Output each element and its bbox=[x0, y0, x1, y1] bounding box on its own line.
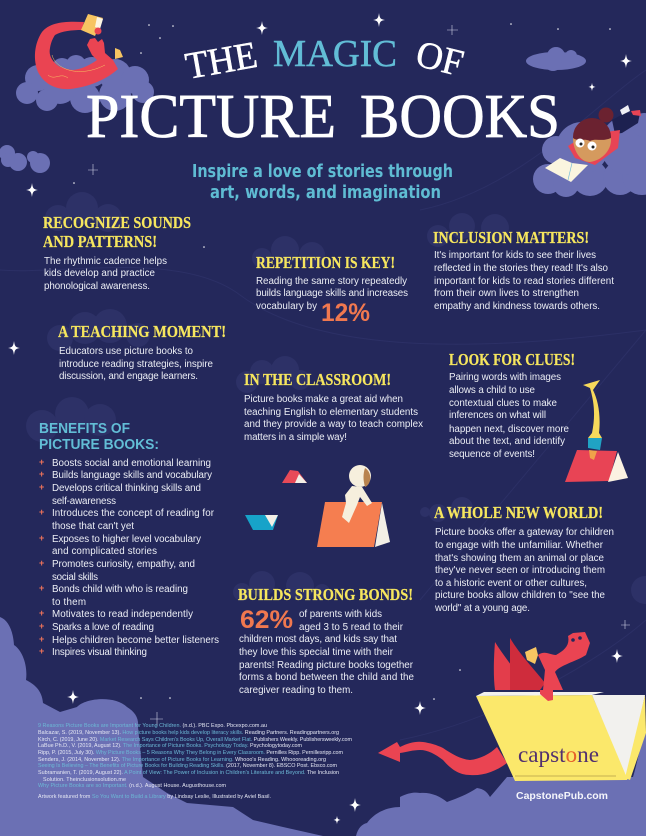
body: that's showing them an animal or place bbox=[435, 553, 605, 564]
section: repetition is key: REPETITION IS KEY! bbox=[256, 253, 395, 272]
bullets: + bbox=[39, 482, 44, 492]
body: The rhythmic cadence helps bbox=[44, 256, 167, 267]
list: Exposes to higher level vocabulary bbox=[52, 534, 201, 545]
list bbox=[52, 458, 219, 658]
body: teaching English to elementary students bbox=[244, 407, 418, 418]
body bbox=[256, 276, 408, 312]
section: a teaching moment: A TEACHING MOMENT! bbox=[58, 322, 226, 341]
section: inclusion matters bbox=[433, 228, 614, 312]
body: Pairing words with images bbox=[449, 372, 561, 383]
word: THE: THE bbox=[182, 34, 260, 88]
body: to engage with the unfamiliar. Whether bbox=[435, 540, 604, 551]
body: Educators use picture books to bbox=[59, 346, 194, 357]
girl reading on cloud bbox=[545, 105, 641, 182]
list: Inspires visual thinking bbox=[52, 647, 147, 658]
references: Kirch, C. (2019, June 20). Market Research Says Children's Books Up, Overall Market Flat. Publishers Weekly. Publishersweekly.com bbox=[38, 737, 352, 743]
heading: PICTURE BOOKS: bbox=[39, 437, 159, 453]
body: aged 3 to 5 read to their bbox=[299, 622, 404, 633]
heading: BENEFITS OF bbox=[39, 421, 130, 437]
list: Motivates to read independently bbox=[52, 609, 193, 620]
body: builds language skills and increases bbox=[256, 288, 408, 299]
heading: RECOGNIZE SOUNDS bbox=[43, 213, 191, 232]
references: Artwork featured from So You Want to Build a Library by Lindsay Leslie, Illustrated by Aviel Basil. bbox=[38, 794, 271, 800]
body: vocabulary by bbox=[256, 301, 317, 312]
body bbox=[59, 346, 214, 382]
section: in the classroom: IN THE CLASSROOM! bbox=[244, 370, 391, 389]
body bbox=[434, 527, 614, 614]
bullets: + bbox=[39, 634, 44, 644]
url: CapstonePub.com bbox=[516, 791, 608, 802]
list: Helps children become better listeners bbox=[52, 635, 219, 646]
body: of parents with kids bbox=[299, 609, 382, 620]
body: they've never seen or introducing them bbox=[435, 565, 605, 576]
section: in the classroom bbox=[244, 370, 423, 443]
word: PICTURE BOOKS: BOOKS bbox=[360, 83, 560, 151]
references: LaBue Ph.D., V. (2019, August 12). The Importance of Picture Books. Psychology Today. Psychologytoday.com bbox=[38, 743, 302, 749]
list: Develops critical thinking skills and bbox=[52, 483, 201, 494]
body: inferences on what will bbox=[449, 410, 546, 421]
body: about the text, and identify bbox=[449, 436, 565, 447]
body: contextual clues to make bbox=[449, 398, 558, 409]
section: builds strong bonds: BUILDS STRONG BONDS! bbox=[238, 585, 413, 604]
word: OF: OF bbox=[412, 33, 468, 85]
logo: capstone bbox=[518, 742, 599, 767]
list: self-awareness bbox=[52, 496, 116, 507]
references: Balcazar, S. (2019, November 13). How picture books help kids develop literacy skills. Reading Partners. Readingpartners.org bbox=[38, 730, 339, 736]
body: empathy and kindness towards others. bbox=[434, 301, 600, 312]
section: a whole new world bbox=[434, 503, 614, 614]
dragon reading, top left bbox=[35, 14, 123, 89]
cloud: under girl bbox=[533, 113, 646, 197]
list: Bonds child with who is reading bbox=[52, 584, 188, 595]
list: Promotes curiosity, empathy, and bbox=[52, 559, 195, 570]
cloud: bottom right bbox=[356, 733, 646, 836]
stat: 12%: 12% bbox=[321, 299, 370, 327]
subtitle bbox=[192, 161, 453, 203]
cloud: small left bbox=[0, 145, 50, 173]
list: to them bbox=[52, 597, 86, 608]
section: a whole new world: A WHOLE NEW WORLD! bbox=[434, 503, 603, 522]
heading bbox=[43, 213, 191, 251]
section: builds strong bonds bbox=[238, 585, 415, 696]
list: those that can't yet bbox=[52, 521, 134, 532]
body: reflected in the stories they read! It's also bbox=[434, 263, 609, 274]
list: Introduces the concept of reading for bbox=[52, 508, 215, 519]
section: inclusion matters: INCLUSION MATTERS! bbox=[433, 228, 589, 247]
body: sequence of events! bbox=[449, 449, 535, 460]
cloud: top left under dragon bbox=[16, 55, 154, 113]
body: It's important for kids to see their lives bbox=[434, 250, 596, 261]
word: PICTURE BOOKS: PICTURE bbox=[86, 83, 336, 151]
section: a teaching moment bbox=[58, 322, 226, 382]
body: introduce reading strategies, inspire bbox=[59, 359, 214, 370]
bullets: + bbox=[39, 583, 44, 593]
heading: AND PATTERNS! bbox=[43, 232, 157, 251]
illustration: blue book bbox=[245, 515, 278, 530]
body: and they provide a way to teach complex bbox=[244, 419, 423, 430]
bullets: + bbox=[39, 469, 44, 479]
section: look for clues: LOOK FOR CLUES! bbox=[449, 350, 575, 369]
list: Boosts social and emotional learning bbox=[52, 458, 211, 469]
illustration: astronaut on orange book bbox=[317, 465, 390, 547]
bullets: + bbox=[39, 507, 44, 517]
list: social skills bbox=[52, 572, 98, 583]
references bbox=[38, 723, 352, 800]
body bbox=[44, 256, 167, 292]
body: children most days, and kids say that bbox=[239, 634, 397, 645]
cloud: bottom left bbox=[0, 617, 323, 836]
body bbox=[434, 250, 614, 312]
references: Ripp, P. (2015, July 30). Why Picture Books – 5 Reasons Why They Belong in Every Classroom. Pernilles Ripp. Pernillesripp.com bbox=[38, 750, 344, 756]
word: PICTURE BOOKS bbox=[86, 83, 560, 151]
body bbox=[244, 394, 423, 443]
stat: 62%: 62% bbox=[240, 606, 293, 634]
cloud: small top right bbox=[526, 47, 586, 71]
bullets bbox=[39, 457, 44, 656]
references: Why Picture Books are so Important. (n.d.). August House. Augusthouse.com bbox=[38, 783, 226, 789]
body bbox=[449, 372, 570, 460]
body: kids develop and practice bbox=[44, 268, 156, 279]
body: caregiver reading to them. bbox=[239, 685, 353, 696]
body: to a historic event or other cultures, bbox=[435, 578, 587, 589]
list: Builds language skills and vocabulary bbox=[52, 470, 212, 481]
word: MAGIC: MAGIC bbox=[273, 33, 397, 75]
bullets: + bbox=[39, 533, 44, 543]
body: Reading the same story repeatedly bbox=[256, 276, 407, 287]
body: Picture books make a great aid when bbox=[244, 394, 403, 405]
bullets: + bbox=[39, 646, 44, 656]
illustration: dragon on yellow book with capstone logo bbox=[378, 632, 646, 802]
subtitle: art, words, and imagination bbox=[210, 182, 441, 203]
references: 9 Reasons Picture Books are Important for Young Children. (n.d.). PBC Expo. Pbcexpo.com.au bbox=[38, 723, 267, 729]
bullets: + bbox=[39, 558, 44, 568]
body bbox=[239, 609, 415, 696]
illustration: red book bbox=[282, 470, 307, 483]
body: world" at a young age. bbox=[434, 603, 530, 614]
references: Subramanien, T. (2019, August 22). A Point of View: The Power of Inclusion in Children's Literature and Beyond. The Inclusion bbox=[38, 770, 339, 776]
illustration: giraffe on red book bbox=[565, 380, 628, 482]
body: phonological awareness. bbox=[44, 281, 150, 292]
body: forms a bond between the child and the bbox=[239, 672, 415, 683]
references: Senders, J. (2014, November 12). The Importance of Picture Books for Learning. Whooo's Reading. Whoooreading.org bbox=[38, 757, 326, 763]
body: important for kids to read stories different bbox=[434, 276, 614, 287]
section: recognize sounds bbox=[43, 213, 191, 292]
section: repetition is key bbox=[256, 253, 408, 327]
body: happen next, discover more bbox=[449, 424, 570, 435]
body: Picture books offer a gateway for children bbox=[435, 527, 614, 538]
bullets: + bbox=[39, 621, 44, 631]
references: Solution. Theinclusionsolution.me bbox=[43, 777, 126, 783]
subtitle: Inspire a love of stories through bbox=[192, 161, 453, 182]
panel: benefits of picture books bbox=[39, 421, 219, 658]
body: from their own lives to strengthen bbox=[434, 288, 579, 299]
bullets: + bbox=[39, 608, 44, 618]
bullets: + bbox=[39, 457, 44, 467]
references: Seeing Is Believing – The Benefits of Picture Books for Building Reading Skills. (2017, November 8). EBSCO Post. Ebsco.com bbox=[38, 763, 338, 769]
body: picture books allow children to "see the bbox=[435, 590, 606, 601]
body: matters in a simple way! bbox=[244, 432, 347, 443]
body: parents! Reading picture books together bbox=[239, 660, 414, 671]
list: and complicated stories bbox=[52, 546, 157, 557]
heading bbox=[39, 421, 159, 453]
faint background clouds bbox=[26, 192, 646, 604]
section: look for clues bbox=[449, 350, 575, 460]
body: allows a child to use bbox=[449, 385, 536, 396]
title: The Magic of Picture Books bbox=[86, 33, 560, 151]
body: discussion, and engage learners. bbox=[59, 371, 198, 382]
list: Sparks a love of reading bbox=[52, 622, 154, 633]
body: they love this special time with their bbox=[239, 647, 394, 658]
